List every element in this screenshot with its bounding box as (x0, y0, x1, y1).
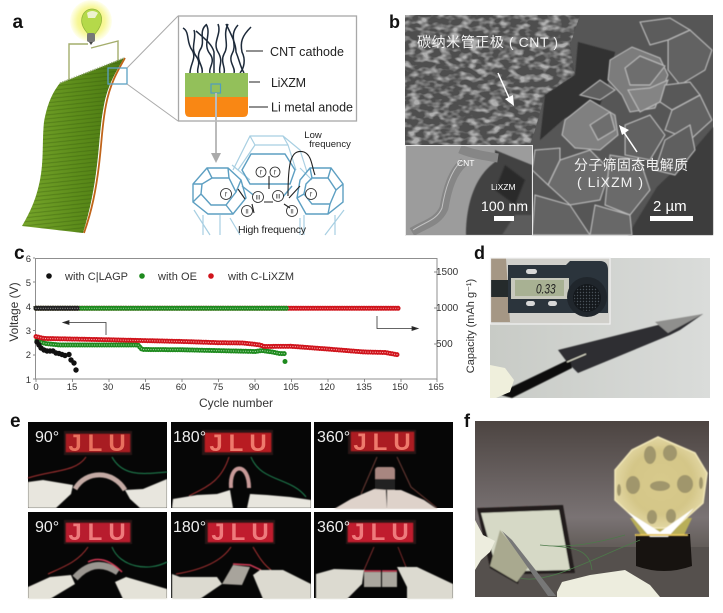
x axis: 45 (140, 382, 150, 393)
gloved hands (557, 570, 660, 597)
x axis: 15 (67, 382, 77, 393)
Li anode layer (185, 97, 248, 117)
photo 360 degrees top (314, 422, 453, 509)
left axis: 6 (26, 254, 31, 265)
right axis: 1000 (436, 303, 459, 314)
photo 360 degrees bottom: 360° (317, 519, 350, 536)
series: capacity retention (36, 306, 399, 311)
x axis: 0 (33, 382, 39, 393)
layered structure inset (178, 16, 356, 121)
site markers: III (255, 196, 261, 202)
photo 360 degrees bottom: JLU (351, 519, 415, 546)
TEM inset (405, 145, 532, 236)
left axis: 1 (26, 375, 31, 386)
panel e: LED bending tests (10, 411, 453, 599)
photo 180 degrees bottom (171, 512, 311, 599)
label electrolyte Chinese (574, 157, 688, 190)
x axis: 30 (103, 382, 113, 393)
label Low frequency: Low (304, 130, 322, 141)
legend (46, 271, 294, 283)
lamp base (636, 534, 692, 571)
x axis: 75 (213, 382, 223, 393)
caliper inset (490, 258, 610, 324)
icon: glowing light bulb (70, 0, 112, 45)
left axis: 5 (26, 278, 31, 289)
panel f: lamp demonstration (464, 411, 709, 597)
site markers: II (245, 210, 249, 216)
x axis: 150 (392, 382, 408, 393)
x axis: 135 (356, 382, 372, 393)
battery sheet (477, 505, 575, 584)
photo 90 degrees top: 90° (35, 429, 59, 446)
photo 90 degrees bottom: JLU (68, 519, 132, 546)
arrow down to zeolite (211, 93, 221, 163)
plot frame (36, 258, 437, 379)
film photograph (490, 258, 710, 398)
digital readout: 0.33 (536, 281, 556, 297)
wires (520, 535, 640, 579)
panel label a: a (12, 12, 24, 33)
right axis title: Capacity (mAh g⁻¹) (465, 279, 477, 373)
acrylic lamp (615, 437, 707, 537)
label CNT cathode: CNT cathode (270, 45, 344, 59)
photo 360 degrees top: JLU (353, 429, 417, 456)
flexible battery sheet (22, 58, 125, 233)
label LiXZM (249, 76, 306, 90)
photo 90 degrees bottom (28, 512, 167, 599)
photo 180 degrees bottom: 180° (173, 519, 206, 536)
SEM image (405, 15, 713, 235)
LiXZM layer (185, 73, 248, 97)
site markers: III (275, 194, 281, 200)
x axis: 120 (319, 382, 335, 393)
callout square on sheet (108, 68, 127, 84)
photo 360 degrees top: 360° (317, 429, 350, 446)
photo 180 degrees top: 180° (173, 429, 206, 446)
site markers: II (290, 210, 294, 216)
legend: with OE (157, 271, 197, 283)
film arrow (497, 314, 703, 398)
scale bar 2 µm (650, 198, 693, 221)
photo 90 degrees top: JLU (68, 430, 132, 457)
panel label c: c (14, 243, 25, 264)
arrow: left axis (63, 320, 106, 335)
label High frequency: High frequency (238, 224, 307, 236)
photo 360 degrees bottom (314, 512, 453, 599)
legend: with C|LAGP (64, 271, 128, 283)
right axis: 500 (436, 339, 453, 350)
site markers: I' (274, 170, 276, 176)
panel label f: f (464, 411, 471, 431)
zoom lines (127, 16, 178, 121)
tweezers (502, 531, 556, 596)
site markers: I' (260, 170, 262, 176)
panel a: flexible battery schematic (12, 0, 356, 236)
photo 90 degrees bottom: 90° (35, 519, 59, 536)
photo 180 degrees bottom: JLU (211, 519, 275, 546)
x axis (33, 379, 444, 393)
panel label e: e (10, 411, 21, 432)
site markers (220, 167, 316, 216)
left axis (26, 254, 35, 386)
arrow to LiXZM (619, 125, 637, 152)
label LiXZM: LiXZM (491, 182, 516, 192)
zeolite framework diagram (193, 130, 351, 236)
series: green OE voltage (37, 340, 288, 364)
left axis title: Voltage (V) (7, 282, 21, 342)
label Low frequency: frequency (309, 139, 351, 150)
panel label d: d (474, 243, 485, 263)
circuit wire (69, 41, 118, 80)
series: black LAGP voltage (34, 339, 79, 373)
left axis: 2 (26, 350, 31, 361)
panel label b: b (389, 12, 400, 32)
x axis: 90 (249, 382, 259, 393)
arrow to CNT (498, 73, 514, 106)
hop arrows (238, 151, 315, 213)
x axis title: Cycle number (199, 396, 273, 410)
photo 90 degrees top (28, 422, 167, 508)
scale bar 2 µm: 2 µm (653, 198, 687, 215)
panel b: SEM micrograph (389, 12, 713, 236)
label LiXZM: LiXZM (271, 76, 306, 90)
right axis: 1500 (436, 267, 459, 278)
left axis: 3 (26, 326, 31, 337)
panel c: cycling chart (7, 243, 477, 410)
dial button (567, 277, 607, 317)
site markers: I' (225, 192, 227, 198)
panel d: thin film photo (474, 243, 710, 398)
label Li metal anode: Li metal anode (271, 100, 353, 114)
label CNT cathode Chinese: 碳纳米管正极 ( CNT ) (417, 34, 558, 50)
label electrolyte Chinese: 分子筛固态电解质 (574, 157, 688, 173)
x axis: 60 (176, 382, 186, 393)
gloved hand (490, 365, 514, 398)
carbon nanotubes (183, 24, 251, 73)
left axis: 4 (26, 302, 31, 313)
x axis: 165 (428, 382, 444, 393)
lamp photograph (475, 421, 709, 597)
right axis (434, 267, 459, 350)
series: red LiXZM voltage (36, 337, 399, 355)
small selection square (211, 84, 220, 93)
label CNT: CNT (457, 158, 474, 168)
x axis: 105 (283, 382, 299, 393)
label Low frequency (304, 130, 351, 150)
site markers: I' (310, 192, 312, 198)
photo 180 degrees top: JLU (209, 430, 273, 457)
legend: with C-LiXZM (227, 271, 294, 283)
arrow: right axis (377, 316, 418, 330)
label electrolyte Chinese: ( LiXZM ) (577, 174, 643, 190)
photo 180 degrees top (171, 422, 311, 508)
scale bar 100 nm: 100 nm (481, 198, 528, 214)
